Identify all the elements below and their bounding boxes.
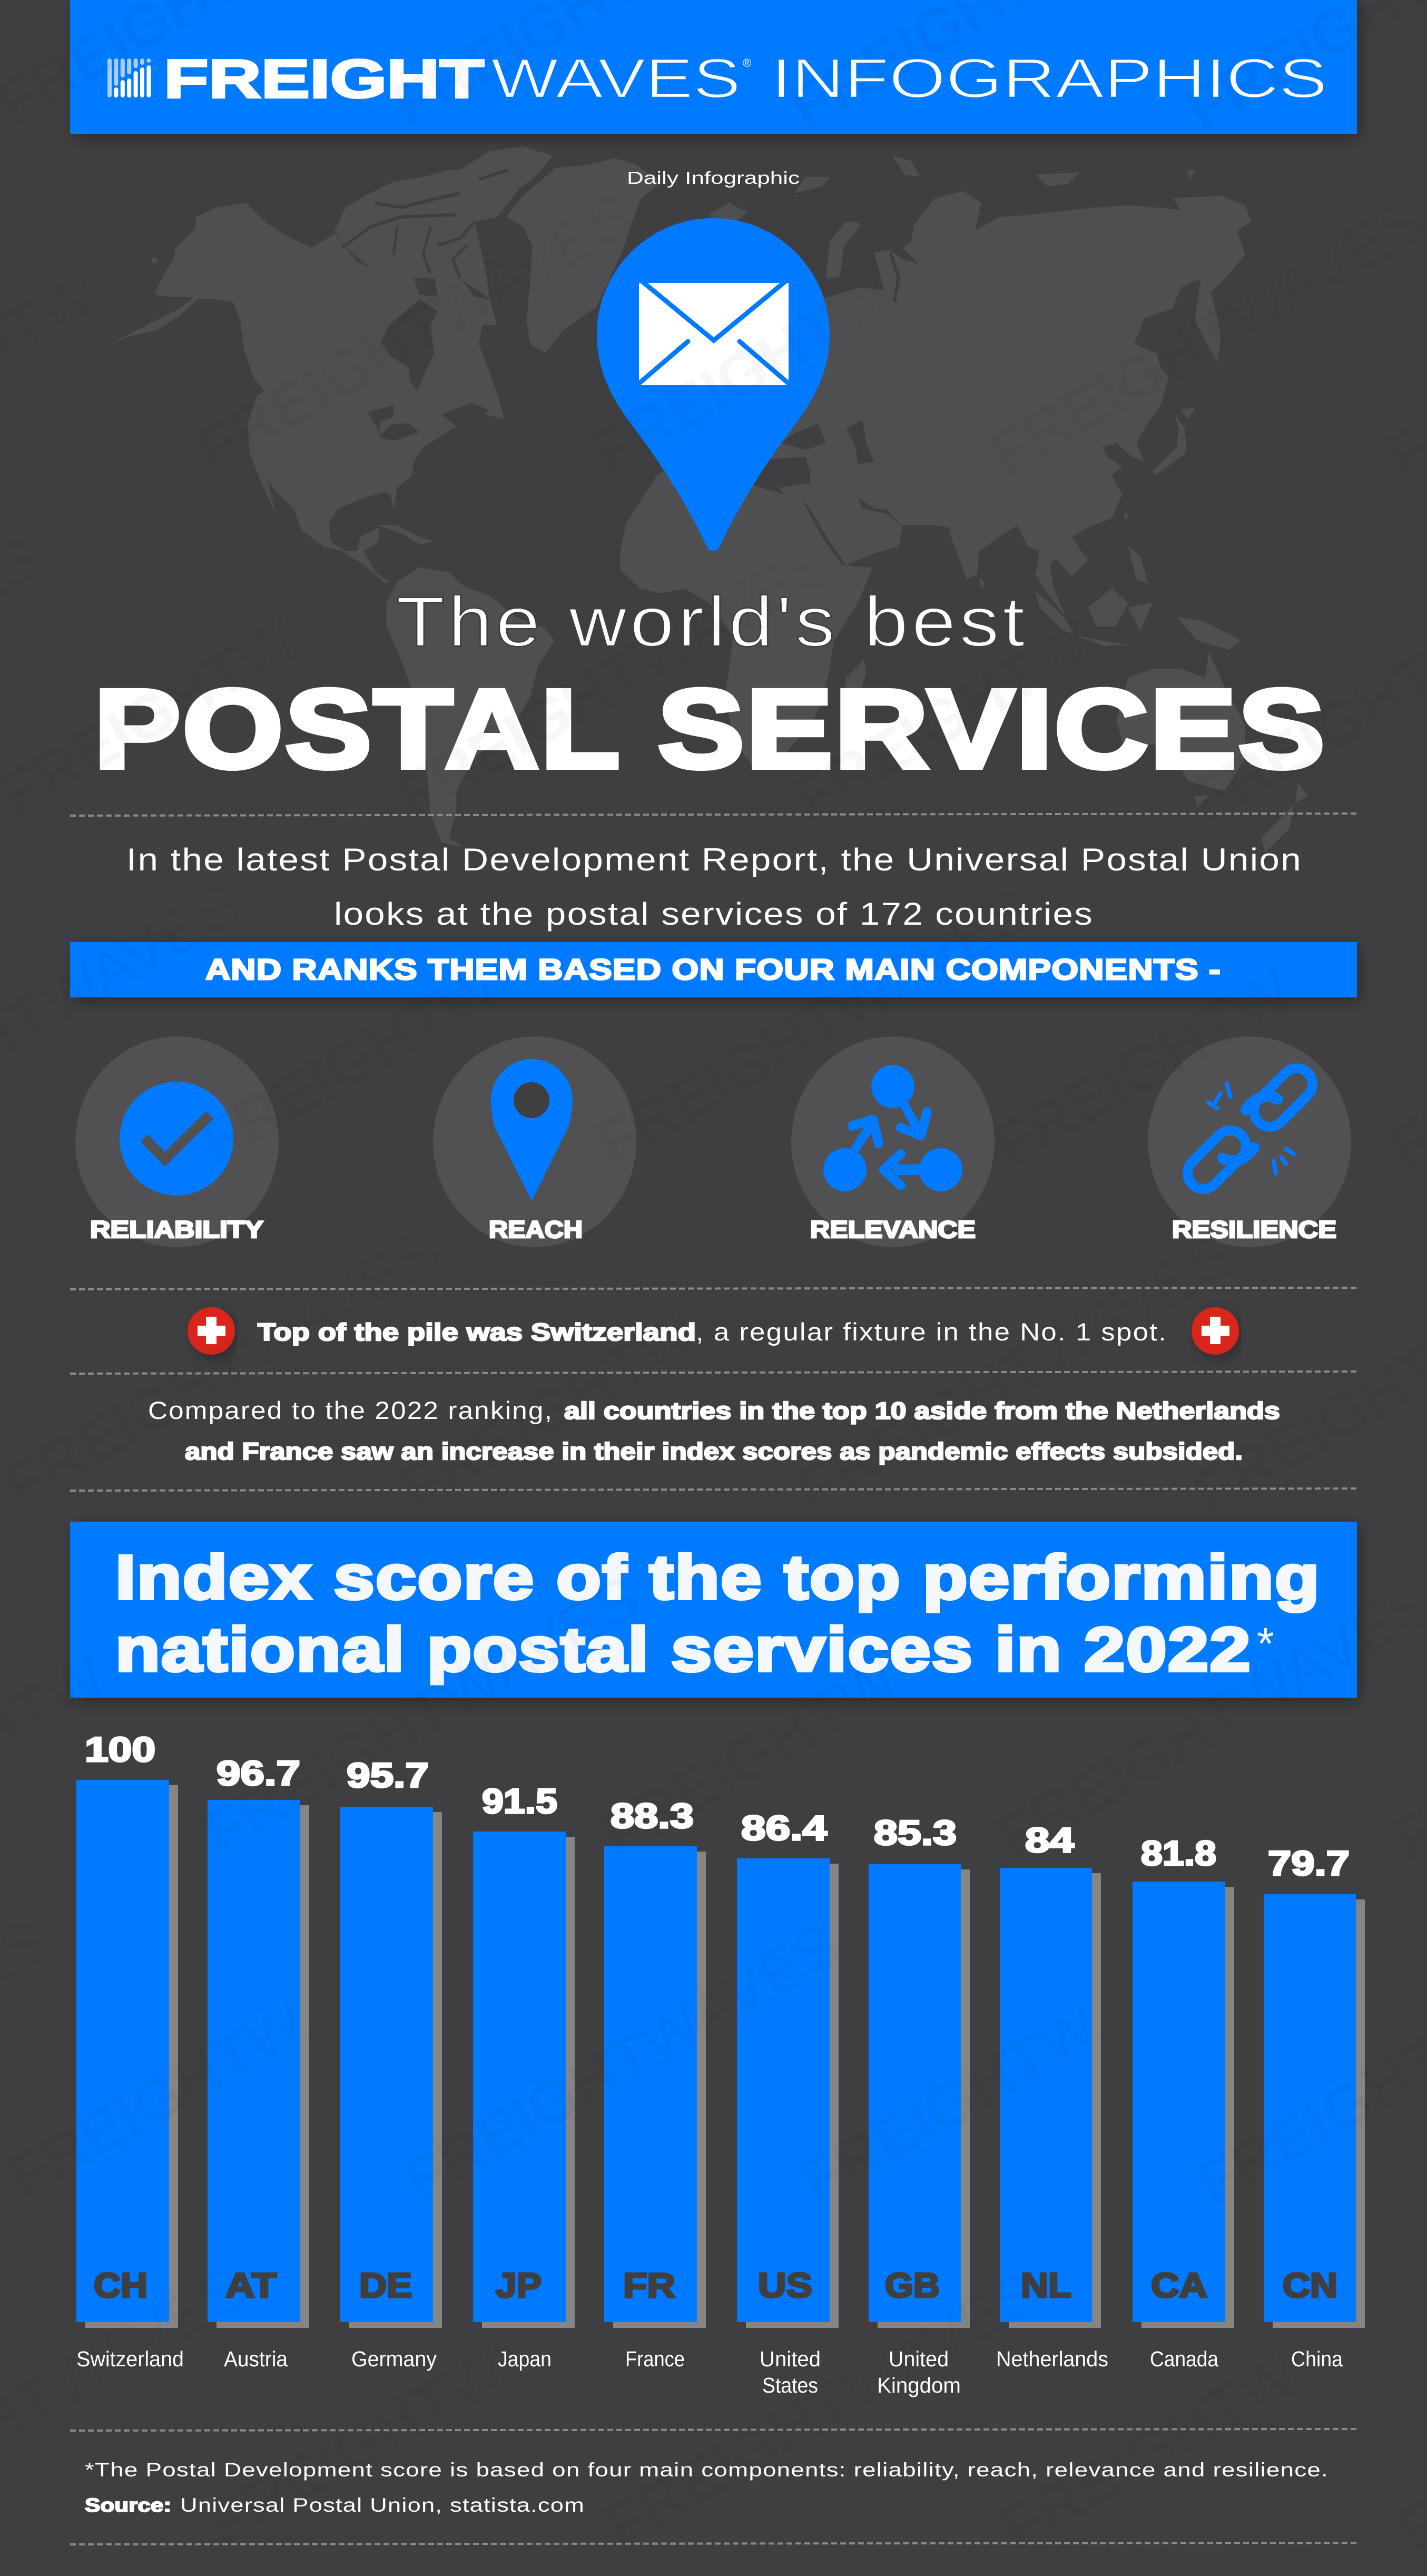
intro text bbox=[126, 842, 1302, 932]
callout: Switzerland top of the pile: , a regular fixture in the No. 1 spot. bbox=[696, 1318, 1167, 1346]
intro text: looks at the postal services of 172 countries bbox=[334, 896, 1094, 932]
bar: Germany: DE bbox=[359, 2266, 412, 2305]
bar: Canada: CA bbox=[1151, 2266, 1207, 2305]
logo wordmark: ® bbox=[743, 56, 751, 70]
title: The world's best bbox=[396, 583, 1028, 661]
bar: Switzerland bbox=[76, 1730, 184, 2371]
bar: Japan: 91.5 bbox=[482, 1781, 557, 1820]
bar: Canada: 81.8 bbox=[1141, 1834, 1216, 1873]
panel: reliability: RELIABILITY bbox=[90, 1216, 263, 1243]
bar: China: 79.7 bbox=[1268, 1844, 1350, 1883]
title: POSTAL SERVICES bbox=[94, 667, 1327, 791]
icon: three nodes with arrows bbox=[823, 1065, 962, 1191]
bar: Germany bbox=[340, 1756, 442, 2371]
bar: United Kingdom: Kingdom bbox=[877, 2373, 961, 2397]
panel: relevance: RELEVANCE bbox=[810, 1216, 976, 1243]
chart heading: national postal services in 2022 bbox=[115, 1615, 1252, 1684]
chart heading: * bbox=[1257, 1619, 1274, 1668]
bar: United States bbox=[737, 1808, 839, 2397]
bar: France: FR bbox=[623, 2266, 675, 2305]
text block: comparison to 2022: and France saw an increase in their index scores as pandemic effects subsided. bbox=[185, 1438, 1243, 1465]
bar: Japan bbox=[473, 1781, 575, 2371]
bar: Germany: Germany bbox=[351, 2347, 437, 2371]
kicker: daily infographic: Daily Infographic bbox=[627, 168, 800, 188]
text block: comparison to 2022: all countries in the top 10 aside from the Netherlands bbox=[564, 1397, 1280, 1424]
panel: reach: REACH bbox=[489, 1216, 583, 1243]
footnote and source: Universal Postal Union, statista.com bbox=[180, 2494, 585, 2516]
title bbox=[94, 583, 1327, 791]
bar: United Kingdom: United bbox=[889, 2347, 949, 2371]
icon: swiss cross left bbox=[188, 1307, 235, 1355]
panel: resilience bbox=[1148, 1036, 1351, 1247]
bar: Austria: Austria bbox=[224, 2347, 288, 2371]
icon: check mark bbox=[120, 1082, 233, 1196]
footnote and source: *The Postal Development score is based on four main components: reliability, reach, relevance and resilience. bbox=[85, 2459, 1328, 2481]
callout: Switzerland top of the pile: Top of the pile was Switzerland bbox=[258, 1318, 696, 1346]
panel: reliability bbox=[75, 1036, 279, 1247]
bar: Japan: Japan bbox=[498, 2347, 552, 2371]
text block: comparison to 2022: Compared to the 2022 ranking, bbox=[148, 1396, 553, 1424]
bar: United States: US bbox=[758, 2266, 812, 2305]
bar: Austria: AT bbox=[225, 2266, 277, 2305]
banner: four main components bbox=[70, 942, 1357, 997]
bar: United States: United bbox=[760, 2347, 821, 2371]
bar: Germany: 95.7 bbox=[347, 1756, 429, 1795]
bar chart bbox=[76, 1730, 1365, 2397]
icon: broken chain bbox=[1181, 1062, 1319, 1196]
chart heading bbox=[70, 1522, 1357, 1698]
bar: Netherlands bbox=[996, 1820, 1108, 2371]
panel: relevance bbox=[791, 1036, 995, 1247]
bar: China bbox=[1264, 1844, 1365, 2371]
logo wordmark: FREIGHT bbox=[164, 48, 484, 109]
logo wordmark: INFOGRAPHICS bbox=[771, 47, 1327, 110]
bar: Switzerland: 100 bbox=[85, 1730, 155, 1769]
logo wordmark: WAVES bbox=[491, 47, 741, 110]
bar: Canada: Canada bbox=[1150, 2347, 1218, 2371]
text block: comparison to 2022 bbox=[148, 1396, 1280, 1465]
header banner bbox=[70, 0, 1357, 134]
bar: France: France bbox=[625, 2347, 685, 2371]
bar: United States: States bbox=[762, 2373, 818, 2397]
bar: Switzerland: Switzerland bbox=[76, 2347, 184, 2371]
icon: swiss cross right bbox=[1192, 1307, 1239, 1355]
bar: France: 88.3 bbox=[611, 1796, 694, 1835]
bar: Canada bbox=[1133, 1834, 1234, 2371]
panel: resilience: RESILIENCE bbox=[1172, 1216, 1336, 1243]
bar: Austria: 96.7 bbox=[216, 1754, 300, 1793]
footnote and source bbox=[85, 2459, 1328, 2516]
icon: location pin bbox=[491, 1059, 573, 1201]
bar: Japan: JP bbox=[496, 2266, 542, 2305]
panel: reach bbox=[433, 1036, 636, 1247]
bar: United Kingdom bbox=[869, 1813, 970, 2397]
bar: France bbox=[604, 1796, 706, 2371]
bar: Netherlands: 84 bbox=[1025, 1820, 1074, 1859]
callout: Switzerland top of the pile bbox=[188, 1307, 1239, 1355]
chart heading: Index score of the top performing bbox=[115, 1543, 1321, 1612]
footnote and source: Source: bbox=[85, 2494, 171, 2516]
bar: Netherlands: Netherlands bbox=[996, 2347, 1108, 2371]
logo icon: barcode bars bbox=[107, 58, 151, 97]
icon: map pin with envelope bbox=[597, 218, 830, 551]
bar: Netherlands: NL bbox=[1021, 2266, 1071, 2305]
intro text: In the latest Postal Development Report, the Universal Postal Union bbox=[126, 842, 1302, 877]
icon: envelope bbox=[636, 277, 791, 386]
logo wordmark bbox=[164, 47, 1327, 110]
bar: United Kingdom: 85.3 bbox=[874, 1813, 957, 1852]
bar: China: China bbox=[1291, 2347, 1343, 2371]
bar: United States: 86.4 bbox=[741, 1808, 827, 1847]
world map background bbox=[105, 146, 1307, 852]
bar: United Kingdom: GB bbox=[885, 2266, 940, 2305]
bar: Switzerland: CH bbox=[94, 2266, 147, 2305]
bar: China: CN bbox=[1283, 2266, 1337, 2305]
banner: four main components: AND RANKS THEM BASED ON FOUR MAIN COMPONENTS - bbox=[205, 953, 1221, 986]
bar: Austria bbox=[208, 1754, 309, 2371]
